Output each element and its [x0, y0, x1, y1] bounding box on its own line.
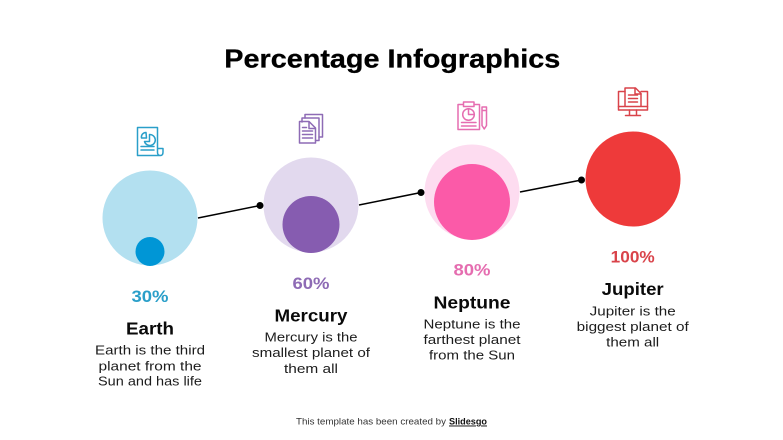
donut chart: 30%	[102, 170, 198, 266]
donut chart: 60%	[264, 158, 358, 253]
description: Jupiter: Jupiter is the	[590, 303, 676, 318]
description: Neptune: Neptune is the	[424, 316, 520, 331]
description: Earth	[95, 343, 205, 389]
icon: stacked documents	[300, 114, 322, 143]
heading: Jupiter: Jupiter	[602, 279, 664, 299]
description: Mercury: smallest planet of	[252, 345, 370, 360]
description: Jupiter: them all	[606, 335, 659, 350]
description: Earth: Earth is the third	[95, 343, 205, 358]
heading: Earth: Earth	[126, 318, 174, 338]
description: Jupiter	[577, 303, 689, 350]
title: Percentage Infographics	[224, 44, 560, 74]
icon: report document	[138, 128, 163, 156]
donut chart: 100%	[586, 132, 680, 226]
percentage: 30%: 30%	[132, 287, 168, 306]
percentage: 100%: 100%	[611, 248, 655, 267]
panel: Earth	[95, 128, 205, 389]
percentage: 80%: 80%	[454, 261, 490, 280]
connector: Neptune to Jupiter	[520, 176, 585, 192]
panel: Neptune	[424, 102, 521, 362]
connector: Mercury to Neptune	[359, 189, 424, 205]
description: Earth: Sun and has life	[98, 374, 202, 389]
description: Neptune: from the Sun	[429, 347, 515, 362]
description: Mercury: Mercury is the	[264, 329, 358, 344]
panel: Mercury	[252, 114, 370, 376]
description: Neptune	[424, 316, 521, 362]
footer credit: Slidesgo	[449, 416, 487, 428]
heading: Neptune: Neptune	[434, 292, 511, 312]
description: Mercury	[252, 329, 370, 376]
icon: document on monitor	[618, 88, 648, 116]
description: Mercury: them all	[284, 361, 338, 376]
description: Jupiter: biggest planet of	[577, 319, 689, 334]
connector: Earth to Mercury	[198, 202, 264, 218]
donut chart: 80%	[424, 144, 520, 240]
percentage: 60%: 60%	[292, 274, 330, 293]
heading: Mercury: Mercury	[274, 305, 348, 325]
icon: clipboard and pencil	[458, 102, 486, 130]
description: Earth: planet from the	[98, 358, 202, 373]
description: Neptune: farthest planet	[424, 332, 521, 347]
footer credit: This template has been created by	[296, 416, 446, 428]
panel: Jupiter	[577, 88, 689, 350]
